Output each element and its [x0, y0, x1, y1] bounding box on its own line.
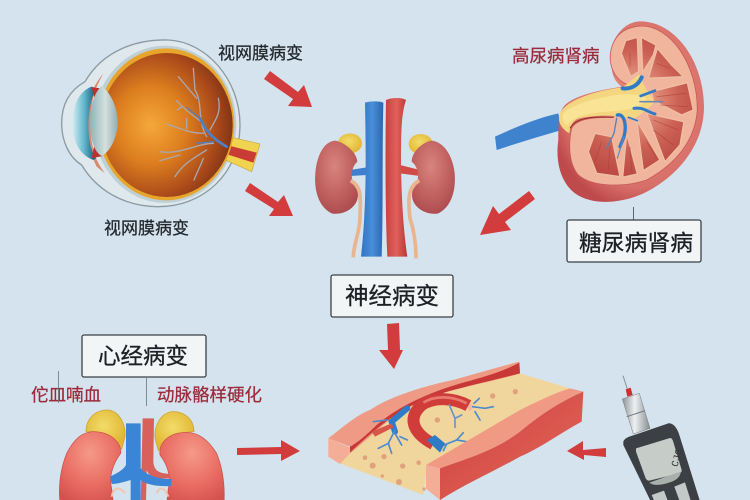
ureter tube [495, 113, 562, 150]
cornea [72, 87, 97, 160]
central kidneys and vessels [315, 98, 455, 258]
aorta [386, 98, 407, 257]
arrow: eye top to kidneys [264, 71, 312, 107]
arrow: kidneys to vessel [237, 440, 300, 461]
left end face [328, 438, 350, 464]
needle hub [626, 388, 633, 397]
vena cava [361, 101, 383, 257]
vein [110, 423, 172, 500]
label box: cardiac neuropathy: 心经病变 [98, 344, 188, 369]
near end face [426, 465, 440, 500]
meter body [623, 423, 702, 500]
bottom-left kidneys [59, 410, 224, 500]
red tube arch [413, 399, 468, 444]
label: eye bottom: 视网膜病变 [104, 219, 189, 238]
label box: neuropathy: 神经病变 [345, 283, 439, 309]
right button [674, 482, 693, 500]
far wall [328, 362, 520, 453]
right kidney large [160, 432, 224, 500]
connector [632, 207, 634, 221]
lens [90, 86, 118, 156]
needle [623, 376, 628, 390]
cortex [570, 26, 697, 185]
label box: cardiac neuropathy [82, 335, 206, 377]
label: ischemia: 佗皿喃血 [31, 385, 101, 405]
blood vessel cross-section [328, 362, 583, 500]
right adrenal large [155, 412, 194, 451]
screen reading: CJ0 [670, 448, 685, 468]
floor [340, 373, 570, 495]
label: eye top: 视网膜病变 [218, 44, 303, 63]
right kidney [412, 141, 455, 214]
right adrenal [409, 134, 433, 154]
label box: diabetic nephropathy [567, 220, 701, 262]
left adrenal large [86, 410, 125, 449]
retinal vessels [160, 68, 227, 180]
arrow: kidney to centre [480, 191, 535, 235]
blue branches [373, 398, 493, 453]
left kidney large [59, 432, 121, 500]
near wall side [440, 392, 583, 500]
near wall top [426, 388, 583, 468]
glucose meter [622, 376, 702, 500]
arrow: eye bottom to kidneys [245, 183, 293, 216]
arrow: meter to vessel [567, 441, 606, 460]
lower plate [649, 472, 681, 485]
left adrenal [338, 133, 362, 153]
big kidney cross-section [495, 21, 704, 202]
label: high-urine nephropathy: 高尿病肾病 [512, 46, 600, 66]
label: atherosclerosis: 动脉骼样硬化 [157, 385, 262, 405]
eye illustration [62, 40, 260, 207]
left button [652, 491, 670, 500]
plaque spots [363, 389, 518, 491]
left kidney [315, 141, 358, 214]
kidney outer [557, 21, 704, 202]
arrow: down to vessel [379, 323, 403, 369]
label box: neuropathy [331, 275, 453, 317]
pelvis [559, 75, 655, 133]
silver cylinder [622, 393, 650, 434]
collecting vessels [607, 77, 663, 158]
pyramids [588, 37, 693, 177]
label box: diabetic nephropathy: 糖尿病肾病 [579, 230, 693, 256]
ureters [351, 181, 360, 257]
radial streaks [595, 53, 688, 172]
screen [636, 438, 682, 481]
artery [141, 418, 170, 500]
